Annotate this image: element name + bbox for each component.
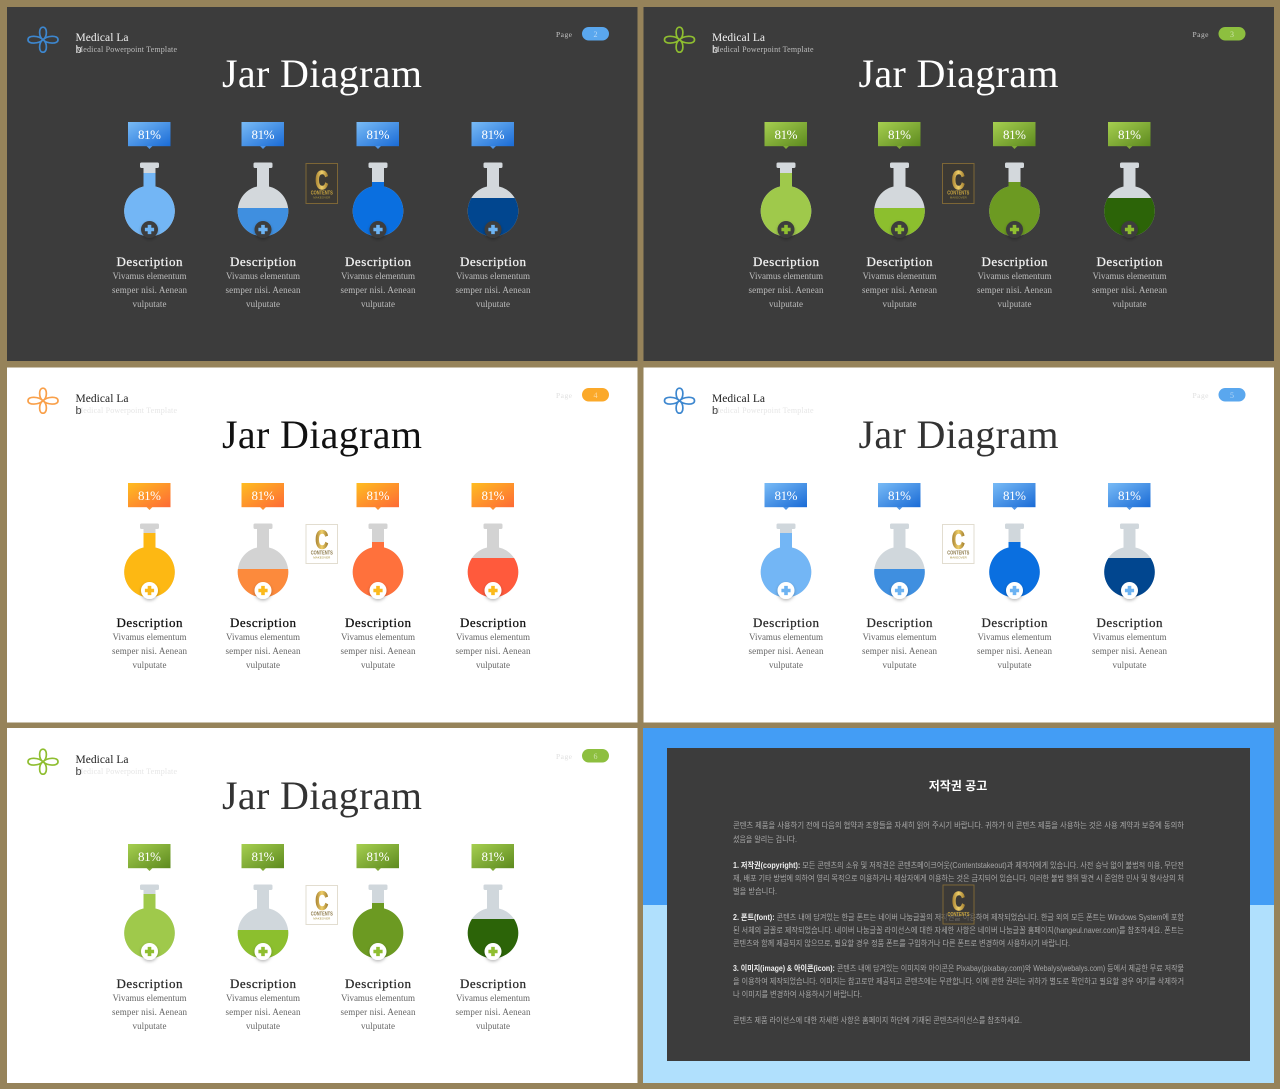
description: Vivamus elementum (862, 271, 936, 281)
page indicator (1192, 388, 1246, 402)
page indicator: Page (1192, 391, 1209, 400)
column 4 (456, 122, 531, 309)
column 3 (340, 844, 416, 1031)
stamp (942, 524, 974, 564)
stamp (306, 164, 338, 204)
column 3 (340, 483, 416, 670)
description: Vivamus elementum (978, 271, 1052, 281)
closing line: 콘텐츠 제품 라이선스에 대한 자세한 사항은 홈페이지 하단에 기재된 콘텐츠라이선스를 참조하세요. (733, 1015, 1022, 1025)
description: vulputate (132, 1021, 166, 1031)
description: Description (753, 615, 820, 630)
value tag: 81% (252, 488, 275, 503)
column 1 (748, 483, 824, 670)
value tag (472, 483, 514, 510)
description (862, 254, 938, 309)
description: vulputate (246, 1021, 280, 1031)
description: Vivamus elementum (226, 271, 300, 281)
description: semper nisi. Aenean (977, 285, 1052, 295)
page indicator: 3 (1230, 30, 1234, 39)
value tag (356, 844, 399, 871)
value tag: 81% (138, 849, 161, 864)
stamp: C (952, 165, 965, 195)
description (977, 254, 1052, 309)
intro paragraph: 콘텐츠 제품을 사용하기 전에 다음의 협약과 조항들을 자세히 읽어 주시기 바랍니다. 귀하가 이 콘텐츠 제품을 사용하는 것은 사용 계약과 보증에 동의하 (733, 820, 1185, 830)
description: semper nisi. Aenean (340, 646, 416, 656)
column 2 (226, 122, 301, 309)
description: Description (116, 254, 183, 269)
description: Vivamus elementum (978, 632, 1052, 642)
description: semper nisi. Aenean (748, 285, 824, 295)
description: vulputate (246, 660, 280, 670)
paragraph: images and icons: 을 이용하여 제작되었습니다. 이미지는 참고로만 제공되고 콘텐츠에는 무관합니다. 이에 관한 권리는 귀하가 별도로 확인하고 필요할 경우 여기를 삭제하거 (733, 976, 1184, 986)
description: semper nisi. Aenean (226, 646, 301, 656)
stamp: CONTENTS (311, 912, 333, 918)
description (340, 976, 416, 1031)
page indicator: 4 (594, 391, 598, 400)
description: semper nisi. Aenean (456, 646, 531, 656)
page indicator (1192, 27, 1246, 40)
brand subtitle: b (712, 405, 718, 417)
description: Vivamus elementum (226, 993, 300, 1003)
value tag: 81% (1118, 127, 1141, 142)
value tag: 81% (482, 849, 505, 864)
flask (760, 524, 812, 603)
value tag: 81% (138, 488, 161, 503)
brand subtitle: b (76, 766, 82, 778)
value tag: 81% (1003, 488, 1026, 503)
icon: logo (664, 27, 694, 52)
column 2 (226, 844, 301, 1031)
description (112, 615, 188, 670)
value tag (356, 122, 399, 149)
value tag: 81% (366, 849, 390, 864)
flask (467, 524, 519, 609)
brand subtitle: Medical Powerpoint Template (76, 45, 177, 54)
flask (238, 162, 288, 240)
stamp: CONTENTS (311, 190, 333, 196)
description: vulputate (361, 660, 395, 670)
value tag (1108, 122, 1150, 149)
flask (237, 524, 289, 609)
description: vulputate (361, 1021, 395, 1031)
flask (988, 524, 1040, 609)
description: semper nisi. Aenean (977, 646, 1052, 656)
description: vulputate (246, 299, 280, 309)
column 4 (1092, 122, 1168, 309)
description (226, 976, 301, 1031)
value tag (993, 483, 1036, 510)
description: Description (345, 615, 412, 630)
brand subtitle: Medical Powerpoint Template (76, 767, 177, 776)
description: vulputate (1112, 299, 1146, 309)
value tag (242, 844, 284, 871)
stamp (942, 164, 974, 204)
description: vulputate (476, 660, 510, 670)
value tag: 81% (252, 849, 275, 864)
icon: logo (28, 749, 58, 774)
description (748, 254, 824, 309)
stamp: MAKEOVER (950, 556, 968, 560)
description: semper nisi. Aenean (112, 646, 188, 656)
description (1092, 254, 1168, 309)
panel: copyright notice (643, 728, 1274, 1083)
description: Description (230, 615, 296, 630)
brand name: Medical La (712, 32, 765, 44)
brand subtitle: b (712, 44, 718, 56)
description: Description (460, 976, 526, 991)
description: vulputate (998, 299, 1032, 309)
description (226, 254, 301, 309)
description: Description (866, 254, 933, 269)
brand subtitle: b (76, 405, 82, 417)
flask (352, 524, 404, 609)
description: Vivamus elementum (112, 993, 186, 1003)
column 2 (862, 483, 938, 670)
value tag (764, 483, 807, 510)
description: Description (116, 615, 183, 630)
description: Vivamus elementum (1092, 271, 1166, 281)
description: semper nisi. Aenean (862, 285, 938, 295)
description: Vivamus elementum (341, 993, 415, 1003)
stamp (306, 524, 338, 564)
page indicator (556, 749, 609, 762)
description (340, 615, 416, 670)
value tag (472, 122, 514, 149)
stamp: MAKEOVER (313, 196, 331, 200)
intro paragraph (733, 820, 1185, 844)
description (862, 615, 938, 670)
description: Description (982, 254, 1048, 269)
value tag: 81% (888, 488, 911, 503)
column 3 (340, 122, 416, 309)
column 2 (862, 122, 938, 309)
flask (989, 162, 1040, 240)
panel: slide 4 light orange (7, 368, 638, 722)
column 1 (112, 122, 188, 309)
value tag (128, 844, 170, 871)
paragraph: font: 2. 폰트(font): 콘텐츠 내에 담겨있는 한글 폰트는 네이버 나눔글꼴의 저작권을 이용하여 제작되었습니다. 한글 외의 모든 폰트는 Windows System에 포함 (733, 912, 1185, 922)
paragraph: font: 콘텐츠와 함께 제공되지 않으므로, 필요할 경우 정품 폰트를 구입하거나 다른 폰트로 변경하여 사용하시기 바랍니다. (733, 938, 1070, 948)
panel: slide 6 light green (7, 728, 638, 1083)
page indicator: Page (556, 391, 573, 400)
description: vulputate (998, 660, 1032, 670)
description: vulputate (1112, 660, 1146, 670)
value tag: 81% (888, 127, 911, 142)
notice heading: 저작권 공고 (929, 778, 987, 793)
description: Vivamus elementum (456, 271, 530, 281)
stamp: C (952, 524, 965, 554)
column 1 (112, 844, 188, 1031)
title: Jar Diagram (222, 773, 422, 818)
paragraph: copyright: 재, 배포 기타 방법에 의하여 영리 목적으로 이용하거나 제삼자에게 이용하는 것은 금지되어 있습니다. 이러한 불법 행위 발견 시 준엄한 민사 및 형사상의 처 (733, 873, 1184, 883)
value tag (993, 122, 1036, 149)
value tag: 81% (774, 488, 798, 503)
column 4 (1092, 483, 1168, 670)
value tag (1108, 483, 1150, 510)
flask (237, 884, 289, 970)
title: Jar Diagram (222, 412, 422, 457)
stamp: CONTENTS (311, 550, 333, 556)
description: Vivamus elementum (112, 271, 186, 281)
paragraph: images and icons: 3. 이미지(image) & 아이콘(icon): 콘텐츠 내에 담겨있는 이미지와 아이콘은 Pixabay(pixabay.com)와 Webalys(webalys.com) 등에서 제공한 무료 저작물 (733, 963, 1184, 973)
paragraph: font: 된 서체의 글꼴로 제작되었습니다. 네이버 나눔글꼴 라이선스에 대한 자세한 사항은 네이버 나눔글꼴 홈페이지(hangeul.naver.com)를 참조하세요. 폰트는 (733, 925, 1184, 935)
stamp: CONTENTS (948, 912, 970, 918)
description: semper nisi. Aenean (226, 285, 301, 295)
description: Vivamus elementum (341, 632, 415, 642)
brand subtitle: b (76, 44, 82, 56)
stamp: CONTENTS (947, 190, 970, 196)
brand subtitle: Medical Powerpoint Template (712, 45, 814, 54)
value tag (128, 122, 170, 149)
description: vulputate (882, 299, 916, 309)
page indicator: 6 (594, 752, 598, 761)
value tag (356, 483, 399, 510)
intro paragraph: 셨음을 알리는 겁니다. (733, 834, 797, 844)
description: vulputate (476, 299, 510, 309)
description: Vivamus elementum (456, 993, 530, 1003)
value tag (242, 122, 284, 149)
stamp: C (952, 886, 965, 916)
description: Description (230, 976, 296, 991)
description: semper nisi. Aenean (112, 1007, 188, 1017)
description: Vivamus elementum (862, 632, 936, 642)
page indicator: Page (556, 30, 573, 39)
stamp: C (315, 524, 328, 554)
description: vulputate (769, 299, 803, 309)
icon: logo (664, 388, 694, 413)
description: Vivamus elementum (226, 632, 300, 642)
value tag: 81% (482, 127, 505, 142)
brand subtitle: Medical Powerpoint Template (712, 406, 814, 415)
description: Vivamus elementum (456, 632, 530, 642)
page indicator: 2 (594, 30, 598, 39)
flask (467, 884, 519, 970)
page indicator: 5 (1230, 391, 1234, 400)
description: vulputate (882, 660, 916, 670)
description: vulputate (361, 299, 395, 309)
stamp: C (315, 886, 328, 916)
description: Vivamus elementum (1092, 632, 1166, 642)
description: Description (982, 615, 1048, 630)
stamp: MAKEOVER (313, 916, 331, 920)
description (456, 254, 531, 309)
stamp (943, 885, 974, 924)
paragraph: copyright: 1. 저작권(copyright): 모든 콘텐츠의 소유 및 저작권은 콘텐츠메이크어웃(Contentstakeout)과 제작자에게 있습니다. 사전 승낙 없이 불법적 이용, 무단전 (733, 860, 1184, 870)
description: Vivamus elementum (749, 632, 823, 642)
column 3 (977, 483, 1052, 670)
description: vulputate (476, 1021, 510, 1031)
value tag: 81% (1003, 127, 1026, 142)
value tag (472, 844, 514, 871)
flask (352, 884, 404, 970)
description: Description (460, 254, 526, 269)
paragraph: font (733, 912, 1185, 948)
value tag: 81% (252, 127, 275, 142)
description (112, 976, 188, 1031)
title: Jar Diagram (222, 51, 422, 96)
page indicator: Page (556, 752, 573, 761)
flask (1104, 524, 1156, 609)
title: Jar Diagram (858, 412, 1058, 457)
description (977, 615, 1052, 670)
value tag: 81% (482, 488, 505, 503)
description: Description (753, 254, 820, 269)
value tag: 81% (1118, 488, 1141, 503)
panel: slide 3 dark green (644, 7, 1274, 361)
page indicator (556, 27, 609, 40)
paragraph: images and icons (733, 963, 1184, 999)
stamp: MAKEOVER (950, 196, 968, 200)
flask (874, 524, 926, 609)
description (226, 615, 301, 670)
value tag: 81% (366, 127, 390, 142)
description: Description (866, 615, 933, 630)
description: Description (1096, 615, 1163, 630)
description: Description (1096, 254, 1163, 269)
flask (124, 884, 176, 964)
description: vulputate (769, 660, 803, 670)
brand name: Medical La (76, 32, 128, 44)
page indicator: Page (1192, 30, 1209, 39)
description: semper nisi. Aenean (456, 285, 531, 295)
stamp: CONTENTS (947, 550, 970, 556)
description: semper nisi. Aenean (112, 285, 188, 295)
value tag: 81% (138, 127, 161, 142)
description (340, 254, 416, 309)
flask (468, 162, 518, 240)
value tag: 81% (774, 127, 798, 142)
description: semper nisi. Aenean (456, 1007, 531, 1017)
column 3 (977, 122, 1052, 309)
page indicator (556, 388, 609, 402)
icon: logo (28, 27, 58, 52)
stamp: MAKEOVER (313, 556, 331, 560)
value tag (764, 122, 807, 149)
description: Description (460, 615, 526, 630)
description: vulputate (132, 660, 166, 670)
value tag (242, 483, 284, 510)
paragraph: copyright: 벌을 받습니다. (733, 886, 777, 896)
description (1092, 615, 1168, 670)
flask (1104, 162, 1155, 240)
description: semper nisi. Aenean (748, 646, 824, 656)
description (748, 615, 824, 670)
value tag (878, 483, 920, 510)
description (456, 976, 531, 1031)
description: Description (345, 254, 412, 269)
flask (760, 162, 812, 243)
flask (874, 162, 925, 240)
brand name: Medical La (76, 754, 128, 766)
column 1 (112, 483, 188, 670)
column 4 (456, 483, 531, 670)
title: Jar Diagram (858, 51, 1058, 96)
description: Description (230, 254, 296, 269)
value tag (128, 483, 170, 510)
paragraph: copyright (733, 860, 1184, 896)
description: semper nisi. Aenean (1092, 646, 1168, 656)
value tag (878, 122, 920, 149)
description: Vivamus elementum (749, 271, 823, 281)
column 1 (748, 122, 824, 309)
description: semper nisi. Aenean (862, 646, 938, 656)
column 4 (456, 844, 531, 1031)
description: Vivamus elementum (341, 271, 415, 281)
icon: logo (28, 388, 58, 413)
description: semper nisi. Aenean (340, 285, 416, 295)
flask (124, 524, 176, 603)
panel: slide 2 dark blue (7, 7, 638, 361)
description (456, 615, 531, 670)
description: semper nisi. Aenean (1092, 285, 1168, 295)
description: semper nisi. Aenean (226, 1007, 301, 1017)
value tag: 81% (366, 488, 390, 503)
description: semper nisi. Aenean (340, 1007, 416, 1017)
brand subtitle: Medical Powerpoint Template (76, 406, 177, 415)
panel: slide 5 light blue (644, 368, 1274, 722)
stamp (306, 886, 338, 924)
flask (352, 162, 404, 240)
description: Description (345, 976, 412, 991)
column 2 (226, 483, 301, 670)
brand name: Medical La (76, 393, 128, 405)
flask (124, 162, 176, 243)
description: Vivamus elementum (112, 632, 186, 642)
brand name: Medical La (712, 393, 765, 405)
description: Description (116, 976, 183, 991)
stamp: C (315, 165, 328, 195)
description (112, 254, 188, 309)
description: vulputate (132, 299, 166, 309)
paragraph: images and icons: 나 이미지를 변경하여 사용하시기 바랍니다. (733, 989, 862, 999)
